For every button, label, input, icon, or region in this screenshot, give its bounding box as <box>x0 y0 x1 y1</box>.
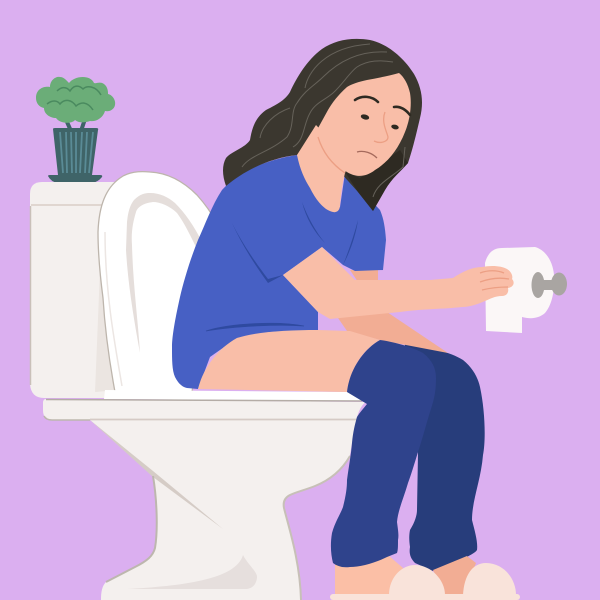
hair back <box>223 39 422 211</box>
hair strands <box>242 44 405 197</box>
slippers <box>330 563 520 600</box>
face <box>317 73 411 176</box>
toilet tank <box>30 182 120 398</box>
eyes <box>360 113 370 121</box>
toilet seat lid <box>98 172 216 392</box>
thigh <box>198 330 380 392</box>
icon: potted plant <box>36 77 115 183</box>
toilet bowl <box>90 420 358 600</box>
shirt <box>172 155 386 389</box>
toilet paper roll <box>485 247 554 333</box>
lower arm <box>338 270 448 353</box>
front leg <box>331 340 436 567</box>
toilet paper holder <box>532 272 567 298</box>
toilet seat rim <box>43 390 367 420</box>
neck and chest <box>297 125 350 212</box>
back leg <box>400 344 485 571</box>
feet <box>335 555 476 595</box>
mouth <box>357 151 377 158</box>
nose <box>374 112 388 142</box>
eyebrows <box>355 97 410 115</box>
upper arm and hand <box>283 247 514 319</box>
